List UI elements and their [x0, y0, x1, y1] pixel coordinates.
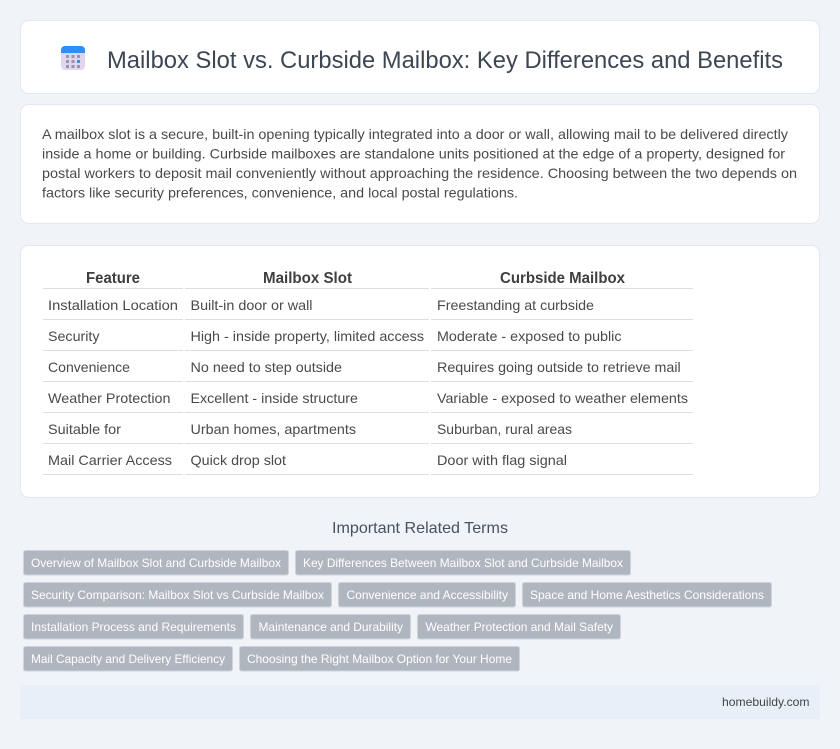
row: weather protection: Variable - exposed to weather elements [437, 390, 688, 406]
row: mail carrier access: Mail Carrier Access [48, 452, 172, 468]
tag: Mail Capacity and Delivery Efficiency [31, 652, 225, 666]
tag [240, 646, 520, 671]
row: mail carrier access [48, 452, 567, 468]
tag: Space and Home Aesthetics Considerations [530, 588, 764, 602]
tag: Overview of Mailbox Slot and Curbside Mailbox [31, 556, 281, 570]
row: convenience: Convenience [48, 359, 130, 375]
tag [418, 614, 620, 639]
tag: Maintenance and Durability [258, 620, 403, 634]
row: weather protection: Excellent - inside structure [190, 390, 358, 406]
row: mail carrier access: Quick drop slot [190, 452, 286, 468]
panel: intro paragraph: factors like security preferences, convenience, and local postal regulations. [42, 184, 518, 200]
tag: Convenience and Accessibility [346, 588, 508, 602]
related term tags [24, 550, 772, 671]
row: convenience [48, 359, 681, 375]
tag [250, 614, 410, 639]
footer bar: homebuildy.com [722, 695, 810, 709]
tag [24, 646, 232, 671]
panel: intro paragraph: A mailbox slot is a secure, built-in opening typically integrated into a door or wall, allowing mail to be delivered directly [42, 126, 788, 142]
row: convenience: Requires going outside to retrieve mail [437, 359, 681, 375]
tag: Installation Process and Requirements [31, 620, 236, 634]
tag [296, 550, 630, 575]
tag: Choosing the Right Mailbox Option for Your Home [247, 652, 512, 666]
row: security [48, 328, 622, 344]
row: suitable for [48, 421, 572, 437]
row: security: Security [48, 328, 100, 344]
row: convenience: No need to step outside [190, 359, 342, 375]
tag [24, 614, 244, 639]
panel: comparison table [20, 246, 820, 498]
tag: Security Comparison: Mailbox Slot vs Curbside Mailbox [31, 588, 324, 602]
tag: Weather Protection and Mail Safety [426, 620, 613, 634]
table header row [86, 270, 625, 287]
tag: Key Differences Between Mailbox Slot and Curbside Mailbox [303, 556, 623, 570]
row: weather protection: Weather Protection [48, 390, 170, 406]
panel: intro paragraph: inside a home or building. Curbside mailboxes are standalone units positioned at the edge of a property, designed for [42, 146, 785, 162]
heading: related terms: Important Related Terms [332, 520, 508, 537]
panel: intro paragraph: postal workers to deposit mail conveniently without approaching the residence. Choosing between the two depends on [42, 165, 797, 181]
row: installation location: Built-in door or wall [190, 297, 312, 313]
row: installation location: Freestanding at curbside [437, 297, 594, 313]
table header row: Mailbox Slot [263, 270, 353, 287]
row: security: High - inside property, limited access [190, 328, 424, 344]
tag [24, 582, 332, 607]
table header row: Curbside Mailbox [500, 270, 625, 287]
row: suitable for: Suburban, rural areas [437, 421, 572, 437]
tag [338, 582, 516, 607]
tag [522, 582, 772, 607]
row: installation location: Installation Location [48, 297, 178, 313]
footer bar [20, 685, 820, 719]
row: weather protection [48, 390, 688, 406]
row: security: Moderate - exposed to public [437, 328, 622, 344]
row: mail carrier access: Door with flag signal [437, 452, 567, 468]
tag [24, 550, 288, 575]
row: suitable for: Suitable for [48, 421, 121, 437]
row: installation location [48, 297, 594, 313]
title: Mailbox Slot vs. Curbside Mailbox: Key Differences and Benefits [107, 47, 783, 74]
row: suitable for: Urban homes, apartments [190, 421, 356, 437]
header panel [20, 20, 820, 94]
panel: intro paragraph [20, 104, 820, 224]
icon: calendar mailbox [61, 46, 85, 70]
table header row: Feature [86, 270, 140, 287]
